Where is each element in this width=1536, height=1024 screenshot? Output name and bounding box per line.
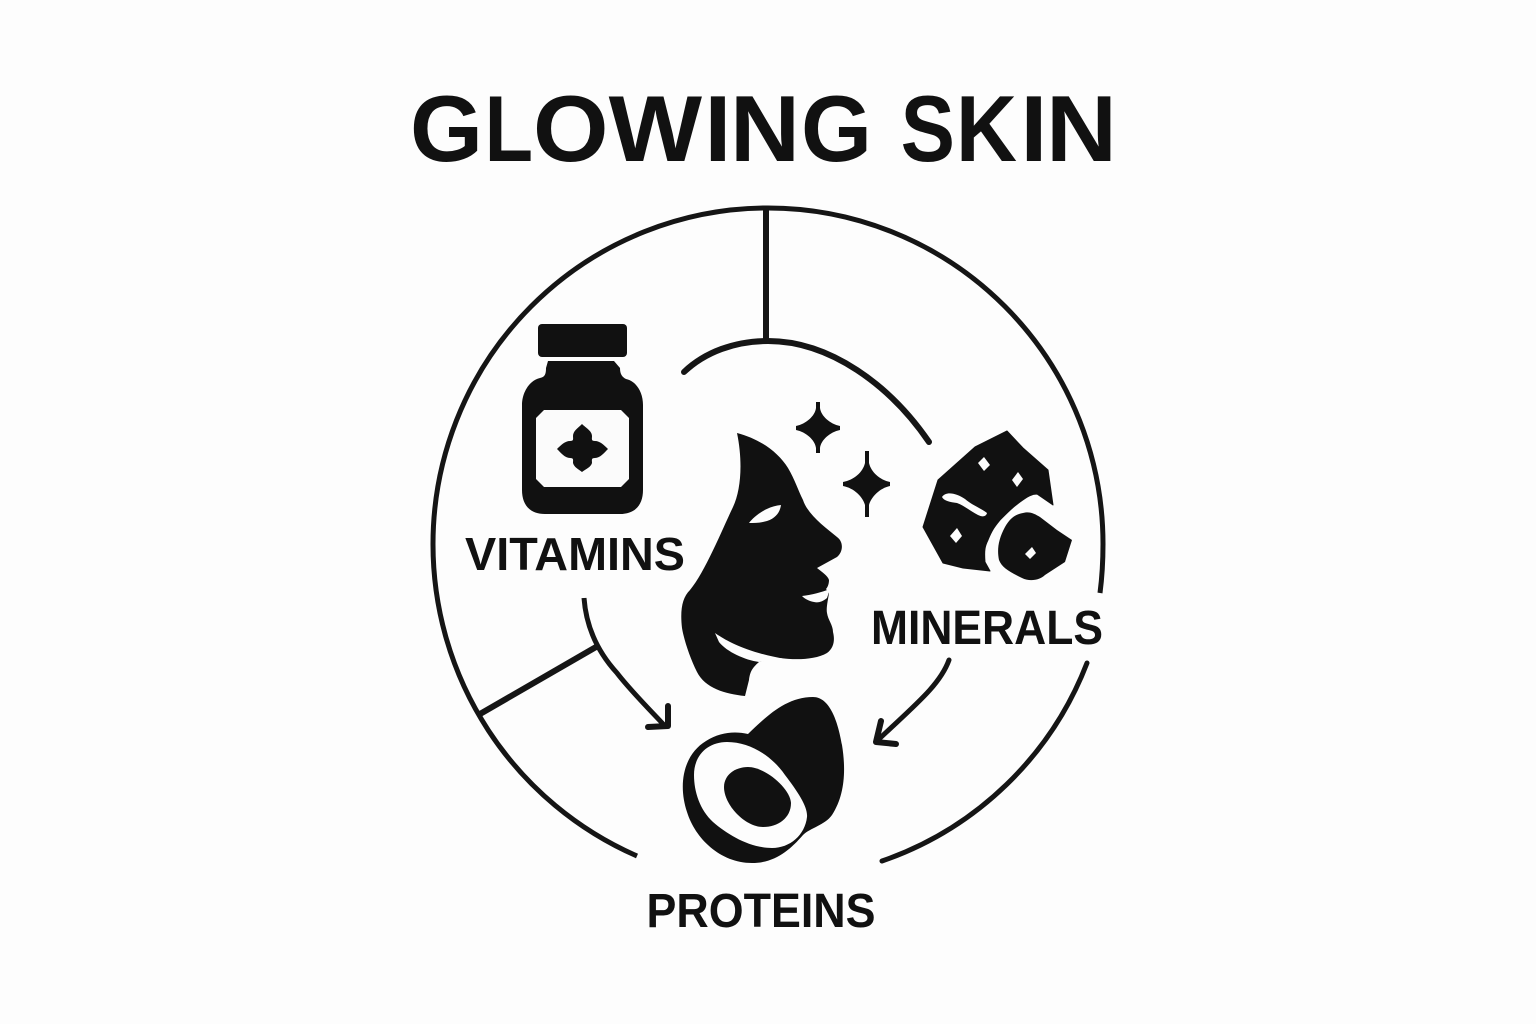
title: I <box>1020 76 1047 181</box>
label: proteins: PROTEINS <box>646 885 876 938</box>
title: W <box>609 76 702 181</box>
icon: vitamin bottle <box>522 324 643 514</box>
title: N <box>1046 76 1117 181</box>
outer circle ring <box>433 208 1103 861</box>
title: O <box>533 76 608 181</box>
title: G <box>410 76 483 181</box>
icon: mineral rocks <box>923 431 1072 580</box>
arrow: minerals to proteins <box>876 660 949 744</box>
arrow: vitamins to proteins <box>584 598 668 727</box>
label: minerals: MINERALS <box>871 602 1103 655</box>
title: N <box>730 76 800 181</box>
icon: small sparkle <box>843 451 890 517</box>
title: I <box>704 76 731 181</box>
icon: large sparkle <box>796 402 840 453</box>
title: G <box>801 76 872 181</box>
label: vitamins: VITAMINS <box>465 528 685 580</box>
title: S <box>901 76 955 181</box>
title: L <box>485 76 533 181</box>
icon: face silhouette <box>681 433 842 696</box>
divider: top spoke and inner arc <box>684 210 929 442</box>
icon: avocado <box>683 697 844 863</box>
title: K <box>956 76 1017 181</box>
divider: lower-left spoke <box>480 647 596 714</box>
